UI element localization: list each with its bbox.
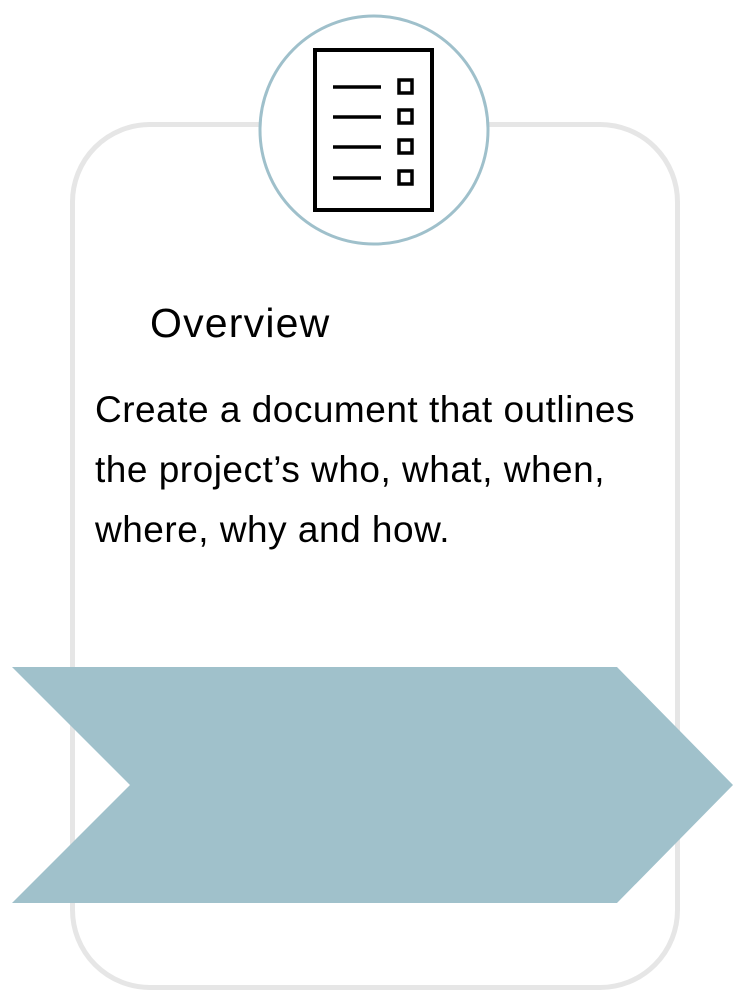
body text bbox=[95, 389, 635, 550]
body text: where, why and how. bbox=[95, 509, 450, 550]
heading: Overview bbox=[150, 300, 330, 346]
body text: the project’s who, what, when, bbox=[95, 449, 605, 490]
card frame bbox=[70, 122, 680, 990]
body text: Create a document that outlines bbox=[95, 389, 635, 430]
